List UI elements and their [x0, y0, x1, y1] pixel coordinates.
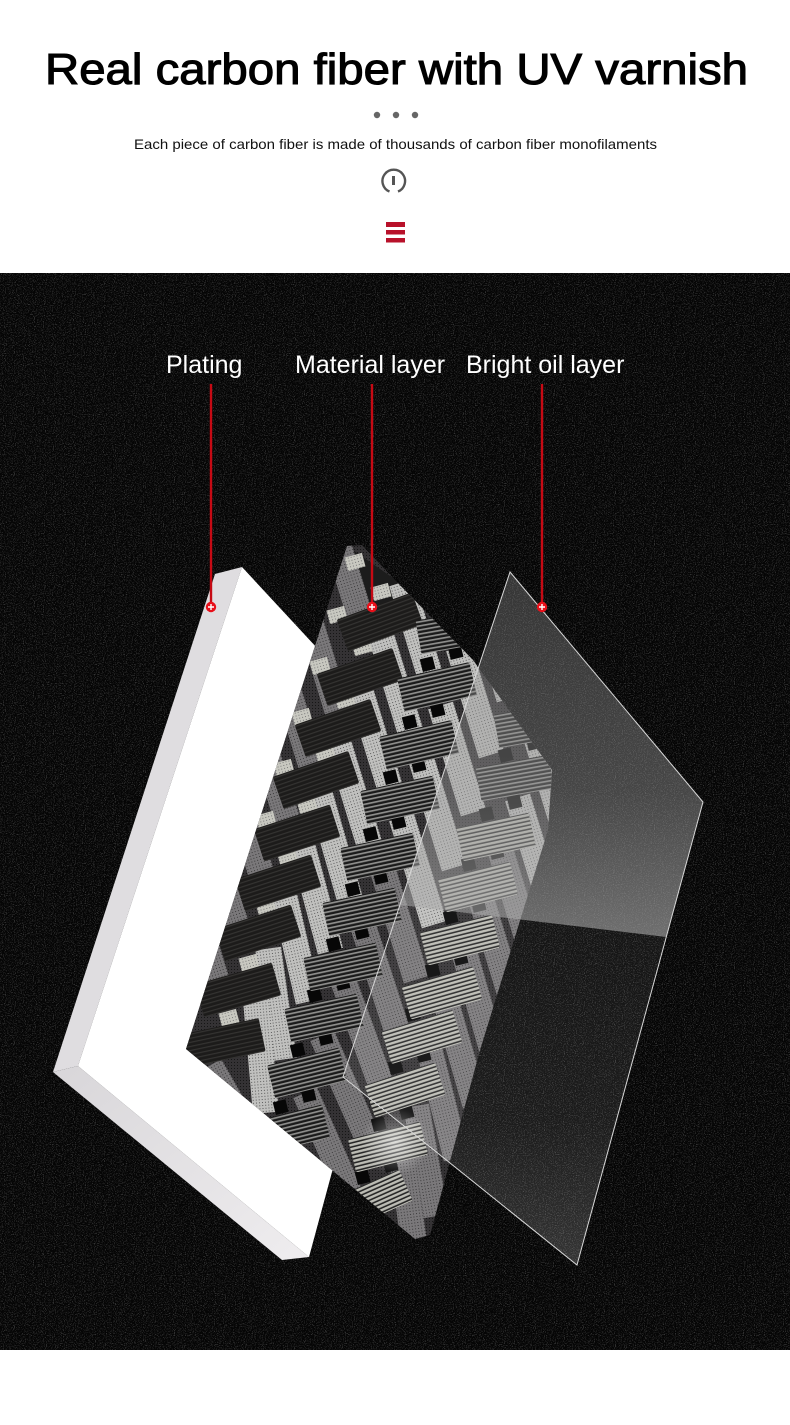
label: Plating: Plating	[166, 351, 242, 379]
panel: dark textured background	[0, 273, 790, 1350]
white plating plate	[53, 567, 340, 1260]
weave: silver vertical bands	[208, 584, 552, 1239]
icon: scroll indicator	[382, 170, 405, 192]
carbon fiber material layer	[186, 545, 552, 1239]
weave: black gaps	[272, 644, 543, 1185]
weave: left edge strands	[206, 546, 370, 988]
label: Material layer: Material layer	[295, 351, 445, 379]
glass bright oil layer	[343, 572, 703, 1265]
subtitle: Each piece of carbon fiber is made of thousands of carbon fiber monofilaments	[134, 136, 657, 152]
weave: dark left horizontal bands	[180, 592, 423, 1068]
weave: striped middle horizontal bands	[267, 618, 476, 1145]
carbon highlight sheen	[364, 1111, 426, 1173]
icon: three dots	[374, 112, 418, 118]
label: Bright oil layer	[466, 351, 624, 612]
label: Plating	[166, 351, 242, 612]
label: Material layer	[295, 351, 445, 612]
icon: red menu bars	[386, 222, 405, 242]
title: Real carbon fiber with UV varnish	[45, 45, 748, 94]
weave: bright right horizontal bands	[348, 712, 552, 1214]
weave: cream gap patches	[218, 553, 392, 1027]
label: Bright oil layer: Bright oil layer	[466, 351, 624, 379]
